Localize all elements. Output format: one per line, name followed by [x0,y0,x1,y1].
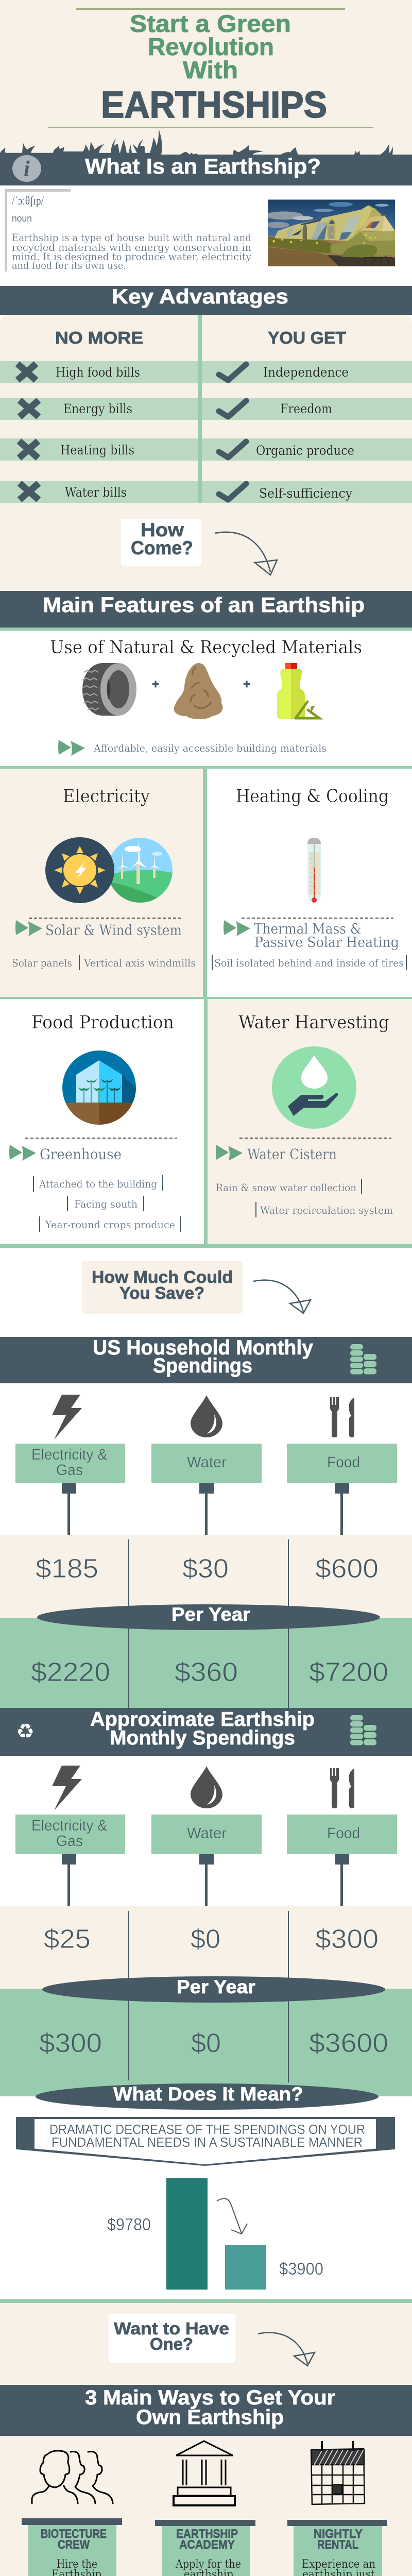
icon: academy building [174,2441,235,2505]
panel: water harvesting [208,999,412,1244]
details: Vertical axis windmills [83,957,196,969]
chart: earthship monthly categories [0,1766,412,2096]
heading: US Household Monthly [93,1336,314,1359]
label: food: Food [327,1825,360,1842]
title: With [183,56,238,83]
list: no more items [56,365,140,500]
callout: dramatic decrease banner: DRAMATIC DECREASE OF THE SPENDINGS ON YOUR [49,2122,365,2137]
icons: crosses [18,364,39,500]
caption: Affordable, easily accessible building materials [93,742,327,754]
icon: double arrow [58,740,85,756]
section: what is an earthship [0,154,412,185]
panel: electricity [0,769,203,997]
monthly values [36,1554,379,1584]
bar: 3900 [225,2245,266,2290]
label: electricity and gas: Gas [56,1833,83,1850]
heading: Electricity [63,786,150,807]
column: nightly rental: NIGHTLY [314,2527,363,2541]
icon: tire [82,663,136,716]
monthly values panel [0,1906,412,1989]
details [216,1179,393,1217]
badge: what does it mean [36,2083,379,2110]
column: nightly rental: Experience an [302,2558,375,2571]
panel: ways to get an earthship [0,2436,412,2576]
column: earthship academy [155,2520,255,2576]
badge: per year [37,1604,380,1630]
value: 9780: $9780 [107,2215,151,2234]
label: electricity and gas: Electricity & [31,1446,107,1463]
badge: per year: Per Year [171,1604,250,1625]
column: earthship academy: ACADEMY [179,2538,235,2552]
yearly values: $0 [191,2028,221,2058]
heading [90,1708,315,1749]
label boxes [15,1444,397,1483]
icon: double arrow [9,1145,36,1161]
arrow [258,2332,315,2366]
icons: checks [219,364,246,500]
details: Year-round crops produce [45,1218,175,1231]
heading: what is an earthship: What Is an Earthship? [85,154,321,178]
column: biotecture crew: BIOTECTURE [41,2527,107,2541]
heading [93,1336,314,1377]
heading: key advantages: Key Advantages [112,285,288,308]
subheading: Thermal Mass & [254,921,362,937]
yearly values: $300 [39,2028,102,2058]
monthly values panel [0,1535,412,1618]
icon: water drop [191,1395,222,1437]
icon: water in hand [272,1046,356,1129]
yearly values [39,2028,388,2058]
icon: water drop [191,1766,222,1808]
callout [109,2314,235,2363]
monthly values: $0 [191,1924,220,1954]
details: Water recirculation system [260,1204,393,1216]
grass silhouette: top [0,129,412,157]
panel: natural and recycled materials [50,637,362,756]
panel: advantages comparison [0,315,412,591]
monthly values [44,1924,379,1954]
list: you get items: Organic produce [256,443,354,458]
label: water: Water [187,1454,227,1471]
icon: info [12,155,41,182]
column: biotecture crew [22,2518,122,2576]
column heading: you get: YOU GET [268,328,346,347]
bar chart: spending comparison [107,2178,323,2290]
definition block: noun [12,213,32,224]
definition block: Earthship is a type of house built with natural and [12,231,251,244]
rows [0,361,412,503]
heading: Monthly Spendings [110,1727,295,1749]
list: no more items: Energy bills [63,401,132,416]
connectors [62,1483,349,1535]
column: nightly rental [287,2520,387,2576]
icon: cutlery [330,1397,354,1437]
section: three main ways: Own Earthship [136,2406,284,2429]
callout: dramatic decrease banner: FUNDAMENTAL NEEDS IN A SUSTAINABLE MANNER [52,2134,363,2150]
icon: info: i [24,157,30,181]
details: Solar panels [12,957,72,969]
yearly values panel [0,1618,412,1708]
heading: Use of Natural & Recycled Materials [50,637,362,658]
label: electricity and gas: Electricity & [31,1817,107,1834]
callout: how come [121,519,201,566]
heading: Approximate Earthship [90,1708,315,1731]
arrow [253,1280,311,1313]
title: Start a Green [130,10,291,37]
panel: want to have one [0,2303,412,2385]
badge: what does it mean: What Does It Mean? [113,2083,303,2105]
list: you get items: Self-sufficiency [259,486,353,501]
definition block: mind. It is designed to produce water, electricity [12,250,252,263]
label boxes [15,1815,397,1854]
icon: lightning [52,1766,82,1810]
column heading: no more: NO MORE [55,328,143,347]
label: water: Water [187,1825,227,1842]
subheading: Greenhouse [40,1146,122,1163]
icon: earth pile [174,663,222,719]
plus: + [152,677,159,691]
column: biotecture crew: CREW [58,2538,90,2552]
heading: Spendings [153,1354,252,1377]
yearly values: $360 [175,1657,238,1687]
label: electricity and gas: Gas [56,1462,83,1479]
badge: per year: Per Year [177,1976,255,1997]
section: main features heading [0,591,412,631]
section: key advantages [0,285,412,315]
subheading [254,921,399,951]
arrow [217,2198,247,2234]
icon: coins [350,1344,376,1375]
column: biotecture crew: Hire the [57,2558,97,2571]
panel: heating and cooling [212,786,407,970]
callout: how much could you save [82,1261,243,1314]
yearly values: $3600 [309,2028,388,2058]
callout: how much could you save: How Much Could [92,1267,233,1286]
icon: double arrow [216,1145,243,1161]
value: 3900: $3900 [279,2259,323,2278]
icon: recycle: ♻ [16,1720,35,1743]
callout: how come: How [141,519,184,540]
monthly values: $300 [315,1924,379,1954]
panel: food production [9,1012,181,1232]
section: us household monthly spendings [0,1336,412,1383]
subheading: Passive Solar Heating [254,935,399,951]
icon: calendar [311,2441,365,2504]
callout: One? [150,2334,193,2353]
page background [0,0,412,155]
title: EARTHSHIPS [101,84,327,126]
bar: 9780 [166,2178,208,2290]
monthly values: $30 [182,1554,229,1584]
definition block: /ˈɔːθʃɪp/ [12,194,44,207]
callout: Want to Have [114,2319,229,2338]
icon: coins [350,1715,376,1745]
connectors [62,1854,349,1906]
yearly values panel [0,1989,412,2096]
definition block [5,189,252,272]
icon: double arrow [224,920,250,936]
plus: + [243,677,250,691]
section: main features heading: Main Features of an Earthship [43,593,365,617]
details [12,955,196,970]
list: you get items: Freedom [280,401,332,416]
details: Facing south [74,1198,138,1210]
heading: Heating & Cooling [236,786,389,807]
column: earthship academy: Apply for the [175,2558,241,2571]
definition block: and food for its own use. [12,259,126,272]
icon: sun [45,837,114,903]
details: Soil isolated behind and inside of tires [214,957,404,969]
list: you get items [256,365,354,501]
dashed line [239,1138,391,1139]
title [48,8,373,128]
dashed line [242,918,393,919]
label: food: Food [327,1454,360,1471]
icon: people [32,2451,113,2503]
label: electricity and gas [31,1446,107,1479]
section: approximate earthship monthly spendings [0,1708,412,1756]
badge: per year [42,1976,385,2003]
heading: Water Harvesting [238,1012,389,1033]
monthly values: $25 [44,1924,91,1954]
list: no more items: Water bills [65,485,127,500]
title: Revolution [148,33,274,60]
details: Rain & snow water collection [216,1181,356,1194]
callout: how much could you save: You Save? [119,1283,204,1302]
monthly values: $185 [36,1554,98,1584]
label: electricity and gas [31,1817,107,1850]
column: earthship academy: EARTHSHIP [176,2527,238,2541]
list: no more items: Heating bills [60,443,134,457]
icon: wind turbines [111,838,173,903]
subheading: Solar & Wind system [45,922,182,939]
yearly values: $7200 [309,1657,388,1687]
icon: thermometer [307,838,321,903]
icon: cutlery [330,1768,354,1808]
column: nightly rental: RENTAL [317,2538,358,2552]
yearly values [31,1657,388,1687]
dashed line [29,918,181,919]
list: you get items: Independence [263,365,349,380]
definition block: recycled materials with energy conservation in [12,241,251,253]
chart: us monthly categories [0,1395,412,1708]
list: no more items: High food bills [56,365,140,380]
icon: greenhouse [62,1050,137,1125]
photo: earthship house [265,199,395,266]
section: three main ways [0,2385,412,2436]
subheading: Water Cistern [247,1146,337,1163]
icon: double arrow [15,920,42,936]
yearly values: $2220 [31,1657,110,1687]
dashed line [25,1138,177,1139]
heading: Food Production [31,1012,174,1033]
callout: how come: Come? [131,537,193,558]
callout: dramatic decrease banner [16,2117,395,2166]
arrow [215,532,277,575]
details [33,1175,181,1232]
icon: lightning [52,1395,82,1439]
details: Attached to the building [39,1178,157,1190]
section: three main ways: 3 Main Ways to Get Your [85,2386,335,2409]
monthly values: $600 [315,1554,379,1584]
icon: recycled bottle [277,663,319,719]
